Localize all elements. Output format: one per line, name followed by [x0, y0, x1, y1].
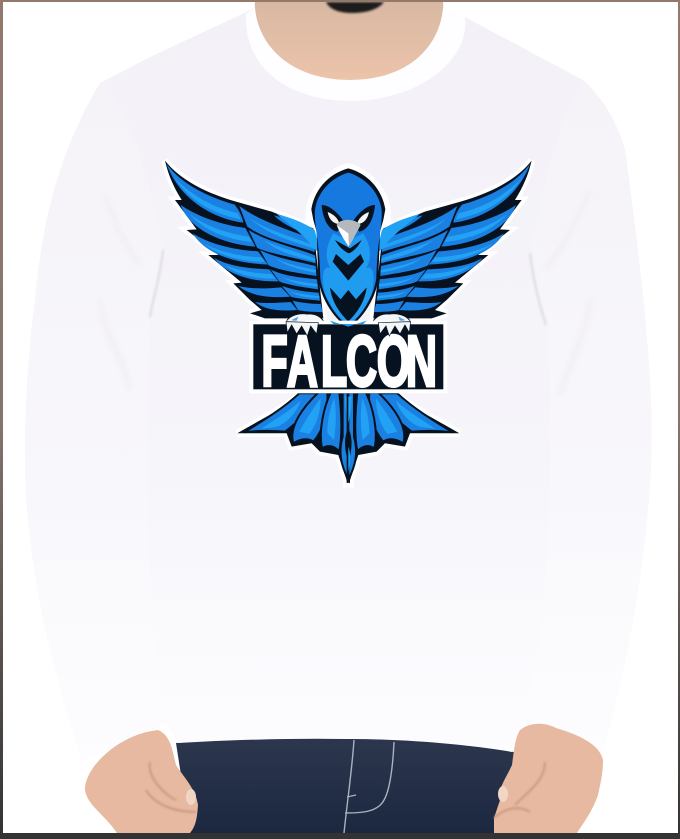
collar rib — [246, 8, 465, 101]
falcon banner — [249, 320, 447, 402]
left hand — [85, 730, 198, 833]
fly stitching — [344, 740, 394, 833]
body — [311, 168, 385, 327]
chest markings — [333, 254, 364, 281]
jeans — [144, 738, 544, 833]
right hand — [494, 724, 603, 833]
talons over banner — [286, 321, 411, 336]
left wing and tail — [165, 161, 350, 483]
left sleeve — [25, 83, 167, 762]
beak — [337, 220, 361, 247]
falcon logo — [165, 161, 532, 483]
logo wordmark: FALCON — [261, 320, 437, 402]
right wing and tail — [347, 161, 532, 483]
eyes — [328, 212, 369, 224]
sleeve folds — [150, 250, 546, 325]
neck skin — [255, 0, 443, 82]
brow — [322, 205, 375, 232]
left thumbnail — [186, 789, 196, 805]
right sleeve — [522, 80, 652, 752]
right thumbnail — [498, 786, 508, 802]
beard shadow — [326, 2, 384, 13]
sticker outline — [165, 161, 532, 483]
